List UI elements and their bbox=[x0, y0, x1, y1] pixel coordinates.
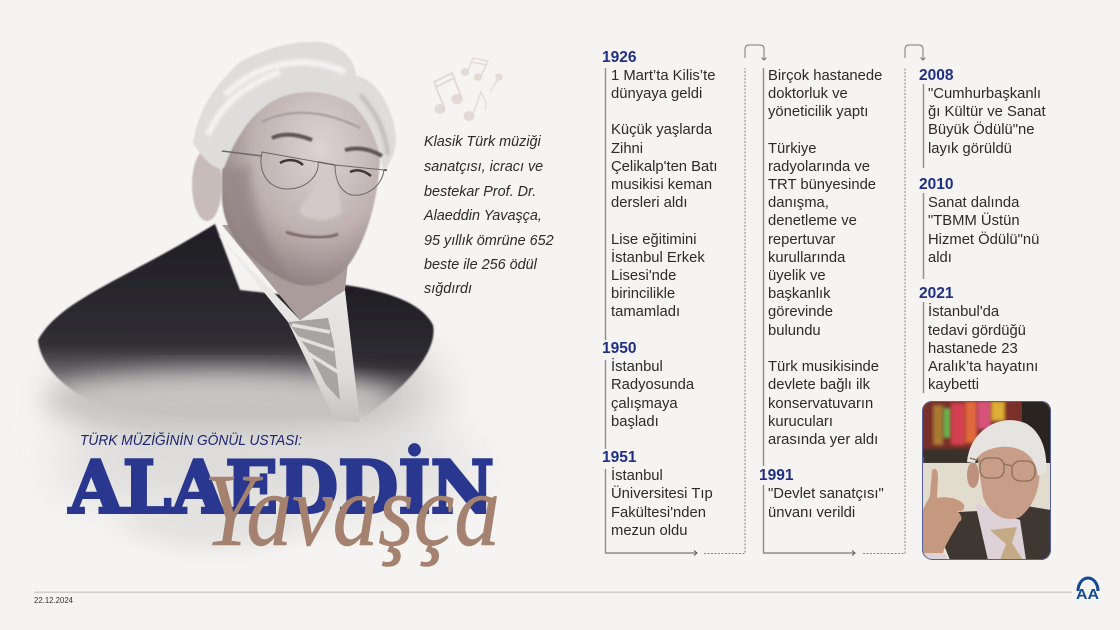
timeline column 2: TRT bünyesinde bbox=[768, 177, 876, 193]
face bbox=[222, 84, 380, 286]
year 2021: 2021 bbox=[919, 285, 954, 302]
intro text: 95 yıllık ömrüne 652 bbox=[424, 233, 554, 249]
forehead lines bbox=[262, 113, 360, 135]
eyebrows bbox=[272, 135, 382, 156]
logo: AA bbox=[1076, 578, 1100, 603]
shirt collar bbox=[217, 234, 360, 422]
timeline column 1: Radyosunda bbox=[611, 377, 695, 393]
timeline column 3: Büyük Ödülü"ne bbox=[928, 120, 1034, 138]
title: surname: Yavaşça bbox=[204, 453, 500, 568]
column 2 rail bbox=[764, 68, 855, 553]
timeline column 1: tamamladı bbox=[611, 304, 680, 320]
jacket bbox=[38, 224, 360, 424]
timeline column 2: danışma, bbox=[768, 195, 829, 211]
timeline column 2: Türkiye bbox=[768, 141, 817, 157]
subtitle: TÜRK MÜZİĞİNİN GÖNÜL USTASI: bbox=[80, 431, 302, 449]
tie bbox=[288, 318, 340, 400]
jacket bbox=[942, 505, 1051, 560]
glasses bbox=[970, 458, 1035, 481]
timeline column 3: hastanede 23 bbox=[928, 341, 1018, 357]
timeline column 3: "TBMM Üstün bbox=[928, 211, 1020, 229]
portrait: main photo bbox=[38, 42, 480, 548]
timeline column 1: dünyaya geldi bbox=[611, 86, 702, 102]
connector arrow to column 3 bbox=[905, 45, 926, 60]
timeline column 2: Türk musikisinde bbox=[768, 359, 879, 375]
timeline column 2: radyolarında ve bbox=[768, 159, 870, 175]
intro text: sanatçısı, icracı ve bbox=[424, 159, 543, 175]
eyes bbox=[280, 160, 371, 176]
timeline column 2: denetleme ve bbox=[768, 213, 857, 229]
year 1951: 1951 bbox=[602, 449, 637, 466]
lower jacket fade bbox=[45, 372, 395, 428]
ear bbox=[192, 149, 222, 221]
face shadow bbox=[226, 165, 285, 275]
hair bbox=[967, 420, 1046, 476]
timeline column 3: Aralık’ta hayatını bbox=[928, 359, 1038, 375]
timeline column 2: repertuvar bbox=[768, 232, 836, 248]
intro text: Alaeddin Yavaşça, bbox=[423, 208, 542, 224]
timeline column 1: İstanbul bbox=[611, 357, 663, 375]
timeline column 2: arasında yer aldı bbox=[768, 432, 878, 448]
timeline column 2: Birçok hastanede bbox=[768, 68, 882, 84]
intro text: bestekar Prof. Dr. bbox=[424, 184, 536, 200]
glasses bbox=[222, 151, 387, 195]
timeline column 1: birincilikle bbox=[611, 286, 675, 302]
timeline column 2: ünvanı verildi bbox=[768, 505, 855, 521]
timeline column 1: çalışmaya bbox=[611, 396, 678, 412]
timeline column 1: Küçük yaşlarda bbox=[611, 122, 713, 138]
timeline column 1: musikisi keman bbox=[611, 177, 712, 193]
ear bbox=[967, 462, 979, 488]
timeline column 2 bbox=[745, 45, 905, 556]
logo: AA: AA bbox=[1076, 587, 1100, 603]
timeline column 2: kurullarında bbox=[768, 250, 846, 266]
timeline column 3: "Cumhurbaşkanlı bbox=[928, 86, 1041, 102]
smoke wash behind portrait bbox=[50, 320, 480, 548]
timeline column 3: ğı Kültür ve Sanat bbox=[928, 104, 1046, 120]
timeline column 3 bbox=[905, 45, 1046, 393]
year 1950: 1950 bbox=[602, 340, 636, 357]
timeline column 1: Fakültesi'nden bbox=[611, 505, 706, 521]
column 3 rail bbox=[922, 84, 924, 393]
timeline column 2: konservatuvarın bbox=[768, 396, 873, 412]
intro text: Klasik Türk müziği bbox=[424, 134, 542, 150]
timeline column 1: başladı bbox=[611, 414, 659, 430]
face bbox=[977, 444, 1040, 519]
tie bbox=[990, 527, 1023, 560]
timeline column 2: bulundu bbox=[768, 323, 821, 339]
hair highlights bbox=[208, 62, 345, 135]
timeline column 2: yöneticilik yaptı bbox=[768, 104, 868, 120]
timeline column 2: üyelik ve bbox=[768, 268, 826, 284]
timeline column 1 bbox=[600, 49, 745, 556]
icon: music notes bbox=[434, 58, 503, 121]
timeline column 1: dersleri aldı bbox=[611, 195, 687, 211]
inset photo bbox=[922, 401, 1051, 560]
year 2008: 2008 bbox=[919, 67, 954, 84]
timeline column 2: başkanlık bbox=[768, 286, 831, 302]
timeline column 1: İstanbul bbox=[611, 466, 663, 484]
column 2 arrow bbox=[852, 550, 855, 556]
footer rule bbox=[34, 592, 1072, 593]
timeline column 3: İstanbul'da bbox=[928, 302, 1000, 320]
intro text bbox=[423, 134, 554, 297]
timeline column 1: Lise eğitimini bbox=[611, 232, 697, 248]
timeline column 2: doktorluk ve bbox=[768, 86, 848, 102]
timeline column 3: Hizmet Ödülü"nü bbox=[928, 230, 1039, 248]
hand bbox=[923, 469, 964, 555]
connector arrow to column 2 bbox=[745, 45, 766, 60]
timeline column 3: kaybetti bbox=[928, 377, 979, 393]
timeline column 1: İstanbul Erkek bbox=[611, 248, 705, 266]
year 2010: 2010 bbox=[919, 176, 953, 193]
timeline column 1: Üniversitesi Tıp bbox=[611, 484, 713, 502]
timeline column 3: Sanat dalında bbox=[928, 195, 1020, 211]
timeline column 1: mezun oldu bbox=[611, 523, 688, 539]
shirt bbox=[975, 503, 1026, 560]
timeline column 1: Zihni bbox=[611, 141, 643, 157]
hair bbox=[193, 42, 396, 172]
timeline column 3: tedavi gördüğü bbox=[928, 323, 1026, 339]
year 1926: 1926 bbox=[602, 49, 637, 66]
intro text: sığdırdı bbox=[424, 281, 472, 297]
neck bbox=[222, 225, 352, 320]
intro text: beste ile 256 ödül bbox=[424, 257, 538, 273]
timeline column 1: 1 Mart’ta Kilis’te bbox=[611, 68, 715, 84]
timeline column 1: Çelikalp'ten Batı bbox=[611, 159, 717, 175]
timeline column 1: Lisesi'nde bbox=[611, 268, 676, 284]
date: 22.12.2024 bbox=[34, 596, 74, 605]
timeline column 2: "Devlet sanatçısı" bbox=[768, 486, 884, 502]
column 1 arrow bbox=[694, 550, 697, 556]
timeline column 2: devlete bağlı ilk bbox=[768, 377, 871, 393]
timeline column 2: görevinde bbox=[768, 304, 833, 320]
column 1 rail bbox=[606, 68, 697, 553]
year 1991: 1991 bbox=[759, 467, 794, 484]
timeline column 2: kurucuları bbox=[768, 414, 833, 430]
timeline column 3: aldı bbox=[928, 250, 952, 266]
timeline column 3: layık görüldü bbox=[928, 141, 1012, 157]
mouth bbox=[286, 232, 338, 237]
title: first name: ALAEDDİN bbox=[68, 444, 494, 530]
nose bbox=[300, 170, 342, 220]
